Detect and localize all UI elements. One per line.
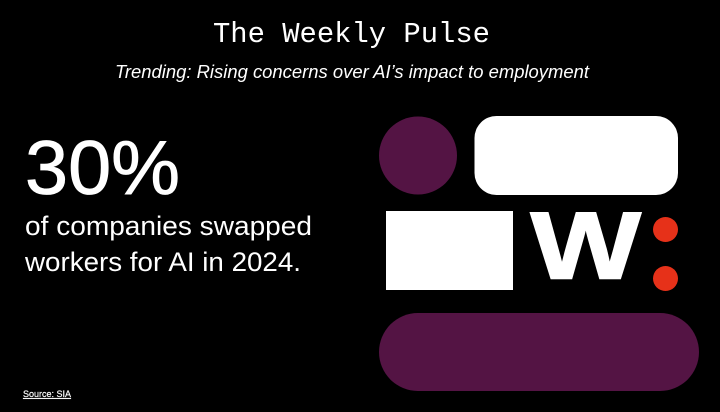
- logo letter W: W: [530, 191, 641, 299]
- title: The Weekly Pulse: [213, 18, 490, 51]
- source link: Source: SIA: [23, 389, 72, 400]
- description line 1: of companies swapped: [25, 211, 312, 241]
- statistic description: [24, 211, 312, 277]
- description line 2: workers for AI in 2024.: [24, 247, 301, 277]
- red dot top: [653, 217, 678, 242]
- purple pill: [379, 313, 699, 391]
- purple circle: [379, 116, 457, 194]
- logo graphic: [379, 116, 699, 391]
- white rectangle: [386, 211, 513, 290]
- red dot bottom: [653, 266, 678, 291]
- subtitle: Trending: Rising concerns over AI’s impact to employment: [115, 61, 590, 82]
- white rounded rectangle: [474, 116, 678, 195]
- statistic: 30%: 30%: [25, 126, 180, 211]
